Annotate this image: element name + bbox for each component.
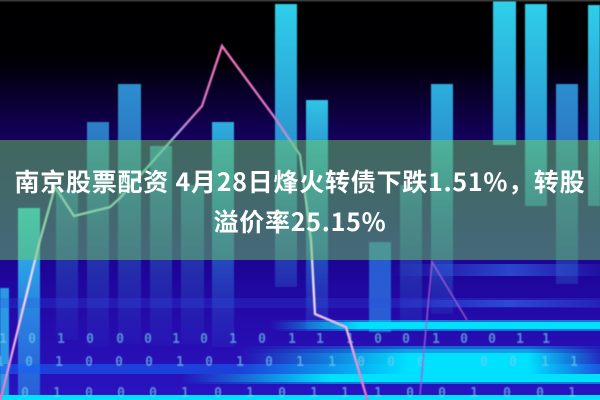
digits row 1: 1 [542,332,550,347]
digits row 1: 1 [316,332,324,347]
digits row 2: 0 [387,355,395,370]
title: 溢价率25.15% [214,203,386,239]
digits row 2: 0 [85,355,93,370]
digits row 1: 1 [288,332,296,347]
digits row 1: 0 [460,332,468,347]
digits row 2: 1 [296,355,304,370]
digits row 1: 1 [172,332,180,347]
digits row 2: 0 [480,355,488,370]
digits row 1: 0 [144,332,152,347]
digits row 1: 1 [432,332,440,347]
binary digits [0,332,578,400]
digits row 2: 0 [25,355,33,370]
digits row 1: 1 [516,332,524,347]
digits row 2: 0 [265,355,273,370]
title: 南京股票配资 4月28日烽火转债下跌1.51%，转股 [15,163,585,199]
top edge strip [0,0,600,2]
digits row 2: 1 [236,355,244,370]
digits row 1: 0 [374,332,382,347]
digits row 2: 0 [205,355,213,370]
digits row 2: 1 [541,355,549,370]
digits row 2: 0 [357,355,365,370]
digits row 1: 0 [86,332,94,347]
digits row 1: 1 [346,332,354,347]
digits row 2: 0 [509,355,517,370]
digits row 1: 0 [258,332,266,347]
digits row 3 [21,386,576,400]
digits row 1: 0 [402,332,410,347]
digits row 2: 0 [115,355,123,370]
translucent title band [0,140,600,260]
digits row 1 [0,332,550,347]
digits row 2: 1 [570,355,578,370]
faint secondary line [420,262,467,395]
digits row 1: 1 [57,332,65,347]
digits row 1: 0 [28,332,36,347]
digits row 1: 0 [488,332,496,347]
trend line [0,46,368,400]
digits row 1: 0 [116,332,124,347]
horizontal light streaks [0,264,600,400]
digits row 2: 1 [55,355,63,370]
digits row 2 [0,355,578,370]
title [15,163,585,239]
digits row 1: 0 [200,332,208,347]
digits row 2: 0 [145,355,153,370]
digits row 1: 1 [229,332,237,347]
digits row 2: 1 [328,355,336,370]
digits row 2: 1 [176,355,184,370]
digits row 2: 0 [417,355,425,370]
